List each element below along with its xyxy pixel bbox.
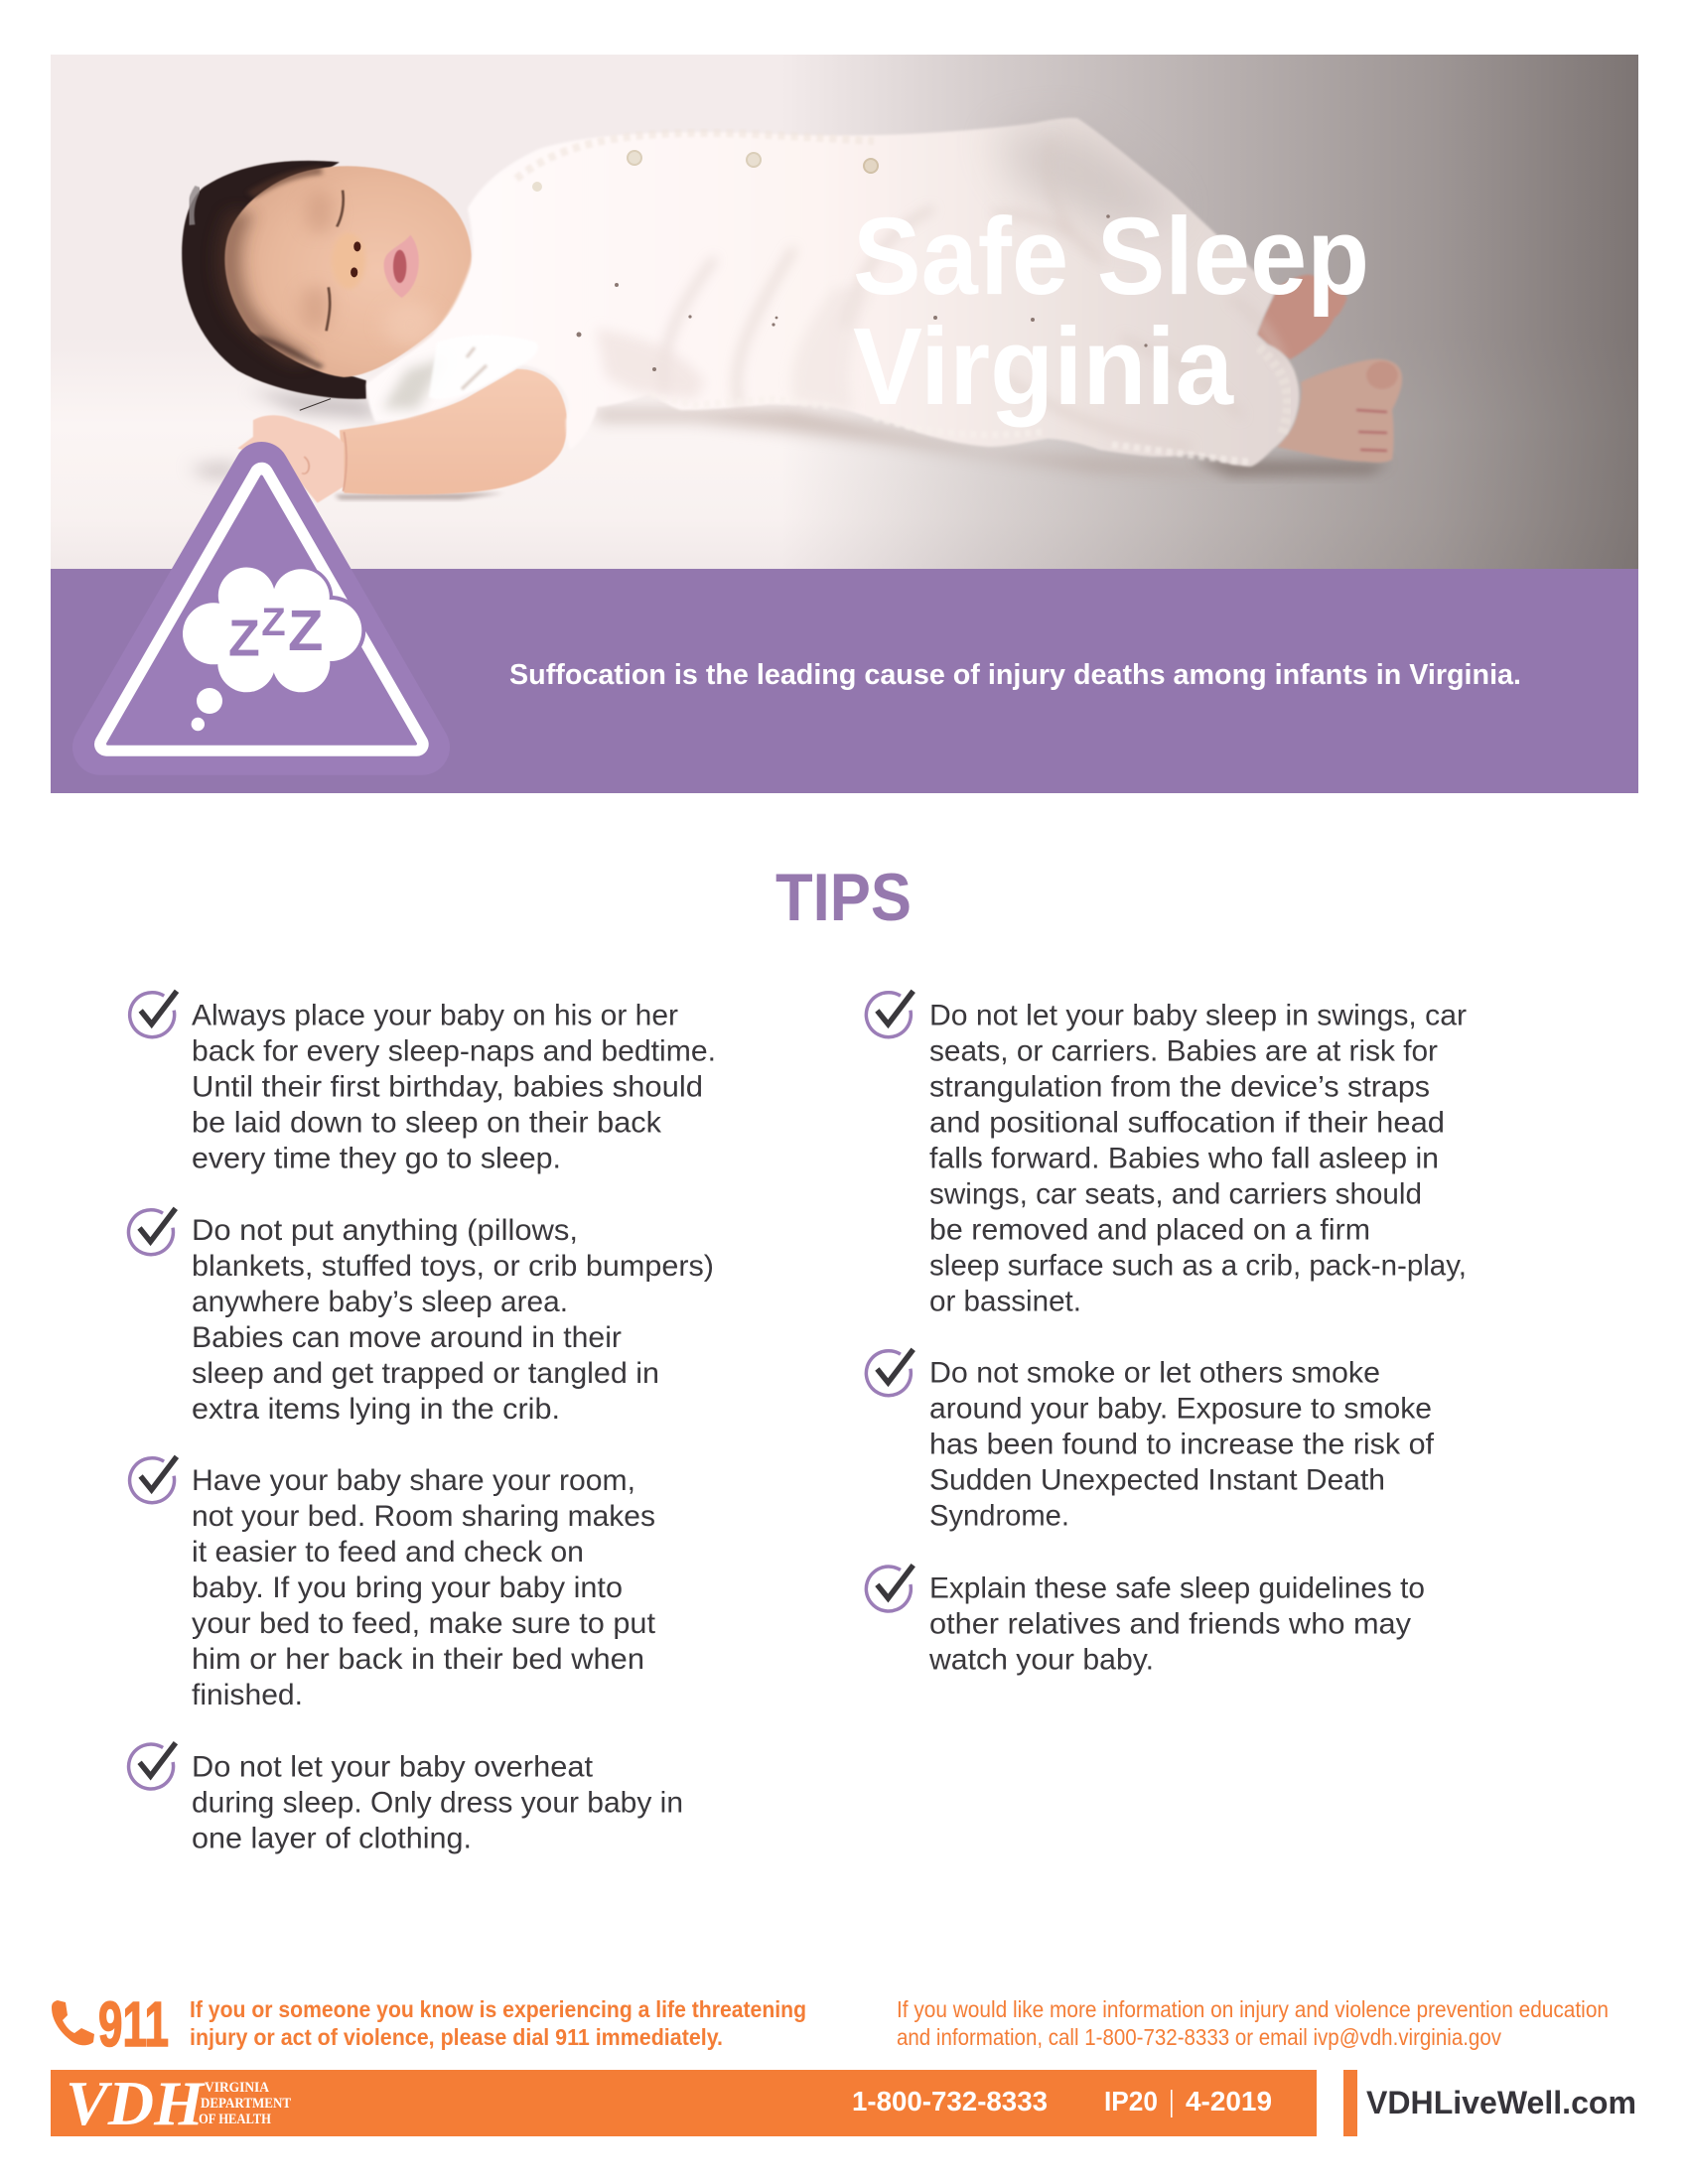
tip 5: strangulation from the device’s straps <box>929 1070 1430 1103</box>
tip 5: Do not let your baby sleep in swings, car <box>929 999 1467 1031</box>
website <box>1343 2070 1636 2136</box>
band message: Suffocation is the leading cause of injury deaths among infants in Virginia. <box>509 659 1521 691</box>
mouth <box>384 235 419 298</box>
hero photo: sleeping baby <box>51 55 1638 569</box>
title: Virginia <box>853 306 1234 428</box>
tip 3: your bed to feed, make sure to put <box>192 1607 655 1640</box>
emergency message: If you or someone you know is experiencing a life threatening <box>190 1996 806 2022</box>
tip 2: sleep and get trapped or tangled in <box>192 1357 659 1390</box>
tip 4: one layer of clothing. <box>192 1822 472 1854</box>
baby head <box>182 161 472 420</box>
zzz letters: Z <box>288 599 323 663</box>
phone number and code: 1-800-732-8333 <box>852 2086 1048 2116</box>
VDH logo <box>66 2068 291 2138</box>
buttons <box>532 151 878 192</box>
tip 6 <box>866 1349 1435 1532</box>
tip 2: Do not put anything (pillows, <box>192 1214 578 1247</box>
tip 4: during sleep. Only dress your baby in <box>192 1786 683 1819</box>
more information message: If you would like more information on injury and violence prevention education <box>897 1996 1609 2022</box>
icon: phone <box>52 2000 94 2045</box>
emergency message: injury or act of violence, please dial 911 immediately. <box>190 2024 723 2050</box>
tip 6: Sudden Unexpected Instant Death <box>929 1463 1385 1496</box>
tip 3: finished. <box>192 1679 303 1711</box>
tip 3: him or her back in their bed when <box>192 1643 644 1676</box>
baby gown <box>366 118 1299 467</box>
tip 3 <box>130 1456 655 1711</box>
zzz letters: Z <box>228 611 260 668</box>
emergency message <box>190 1996 806 2050</box>
more information message <box>897 1996 1609 2050</box>
sleeve fold and lace cuff <box>382 357 447 409</box>
tip 6: around your baby. Exposure to smoke <box>929 1392 1432 1425</box>
tip 5: falls forward. Babies who fall asleep in <box>929 1142 1439 1174</box>
purple message band <box>51 569 1638 793</box>
tip 5: or bassinet. <box>929 1285 1081 1317</box>
thought bubbles <box>192 688 222 731</box>
title <box>853 196 1369 428</box>
tip 3: Have your baby share your room, <box>192 1464 635 1497</box>
title: Safe Sleep <box>853 196 1369 318</box>
phone number and code <box>852 2086 1272 2117</box>
tip 1: Until their first birthday, babies should <box>192 1070 703 1103</box>
tip 6: Do not smoke or let others smoke <box>929 1356 1380 1389</box>
nose <box>332 232 365 289</box>
website: VDHLiveWell.com <box>1366 2085 1636 2120</box>
tip 7: Explain these safe sleep guidelines to <box>929 1571 1425 1604</box>
tip 2: blankets, stuffed toys, or crib bumpers) <box>192 1250 714 1283</box>
VDH logo: VDH <box>66 2068 206 2138</box>
phone number and code: 4-2019 <box>1186 2086 1272 2116</box>
tip 7 <box>866 1566 1425 1676</box>
cloud halo <box>269 566 365 665</box>
911 label: 911 <box>98 1988 169 2060</box>
upper leg shading <box>993 124 1182 233</box>
tip 1: back for every sleep-naps and bedtime. <box>192 1034 716 1067</box>
tip 2: extra items lying in the crib. <box>192 1393 560 1426</box>
tip 5: and positional suffocation if their head <box>929 1106 1445 1139</box>
tip 1 <box>130 991 716 1174</box>
tip 1: be laid down to sleep on their back <box>192 1106 661 1139</box>
tip 5: swings, car seats, and carriers should <box>929 1177 1422 1210</box>
eyes <box>327 191 344 331</box>
warning triangle icon with sleep cloud <box>100 470 422 748</box>
baby arm and hand <box>194 369 567 503</box>
VDH logo: DEPARTMENT <box>201 2096 291 2112</box>
baby calf and foot <box>1257 275 1402 463</box>
tip 3: baby. If you bring your baby into <box>192 1571 623 1604</box>
VDH logo: VIRGINIA <box>205 2080 269 2096</box>
tip 3: not your bed. Room sharing makes <box>192 1500 655 1533</box>
tip 4: Do not let your baby overheat <box>192 1750 593 1783</box>
tip 3: it easier to feed and check on <box>192 1536 584 1569</box>
tip 1: every time they go to sleep. <box>192 1142 561 1174</box>
tip 2: anywhere baby’s sleep area. <box>192 1286 568 1318</box>
tip 6: Syndrome. <box>929 1499 1069 1532</box>
tip 4 <box>129 1743 683 1854</box>
tip 5: sleep surface such as a crib, pack-n-play, <box>929 1249 1467 1282</box>
tip 6: has been found to increase the risk of <box>929 1428 1435 1460</box>
more information message: and information, call 1-800-732-8333 or email ivp@vdh.virginia.gov <box>897 2024 1501 2050</box>
tip 7: watch your baby. <box>928 1643 1154 1676</box>
phone number and code: IP20 <box>1104 2086 1158 2116</box>
tip 5: be removed and placed on a firm <box>929 1213 1370 1246</box>
tip 7: other relatives and friends who may <box>929 1607 1411 1640</box>
footer bar <box>51 2068 1317 2138</box>
cloud <box>183 568 361 692</box>
tip 2: Babies can move around in their <box>192 1321 622 1354</box>
VDH logo: OF HEALTH <box>199 2112 271 2127</box>
zzz letters: Z <box>261 601 286 644</box>
tip 1: Always place your baby on his or her <box>192 999 678 1031</box>
tip 5 <box>866 991 1467 1317</box>
zzz letters <box>228 599 323 668</box>
tip 2 <box>128 1208 714 1426</box>
tip 5: seats, or carriers. Babies are at risk for <box>929 1034 1438 1067</box>
heading: tips: TIPS <box>775 860 912 935</box>
